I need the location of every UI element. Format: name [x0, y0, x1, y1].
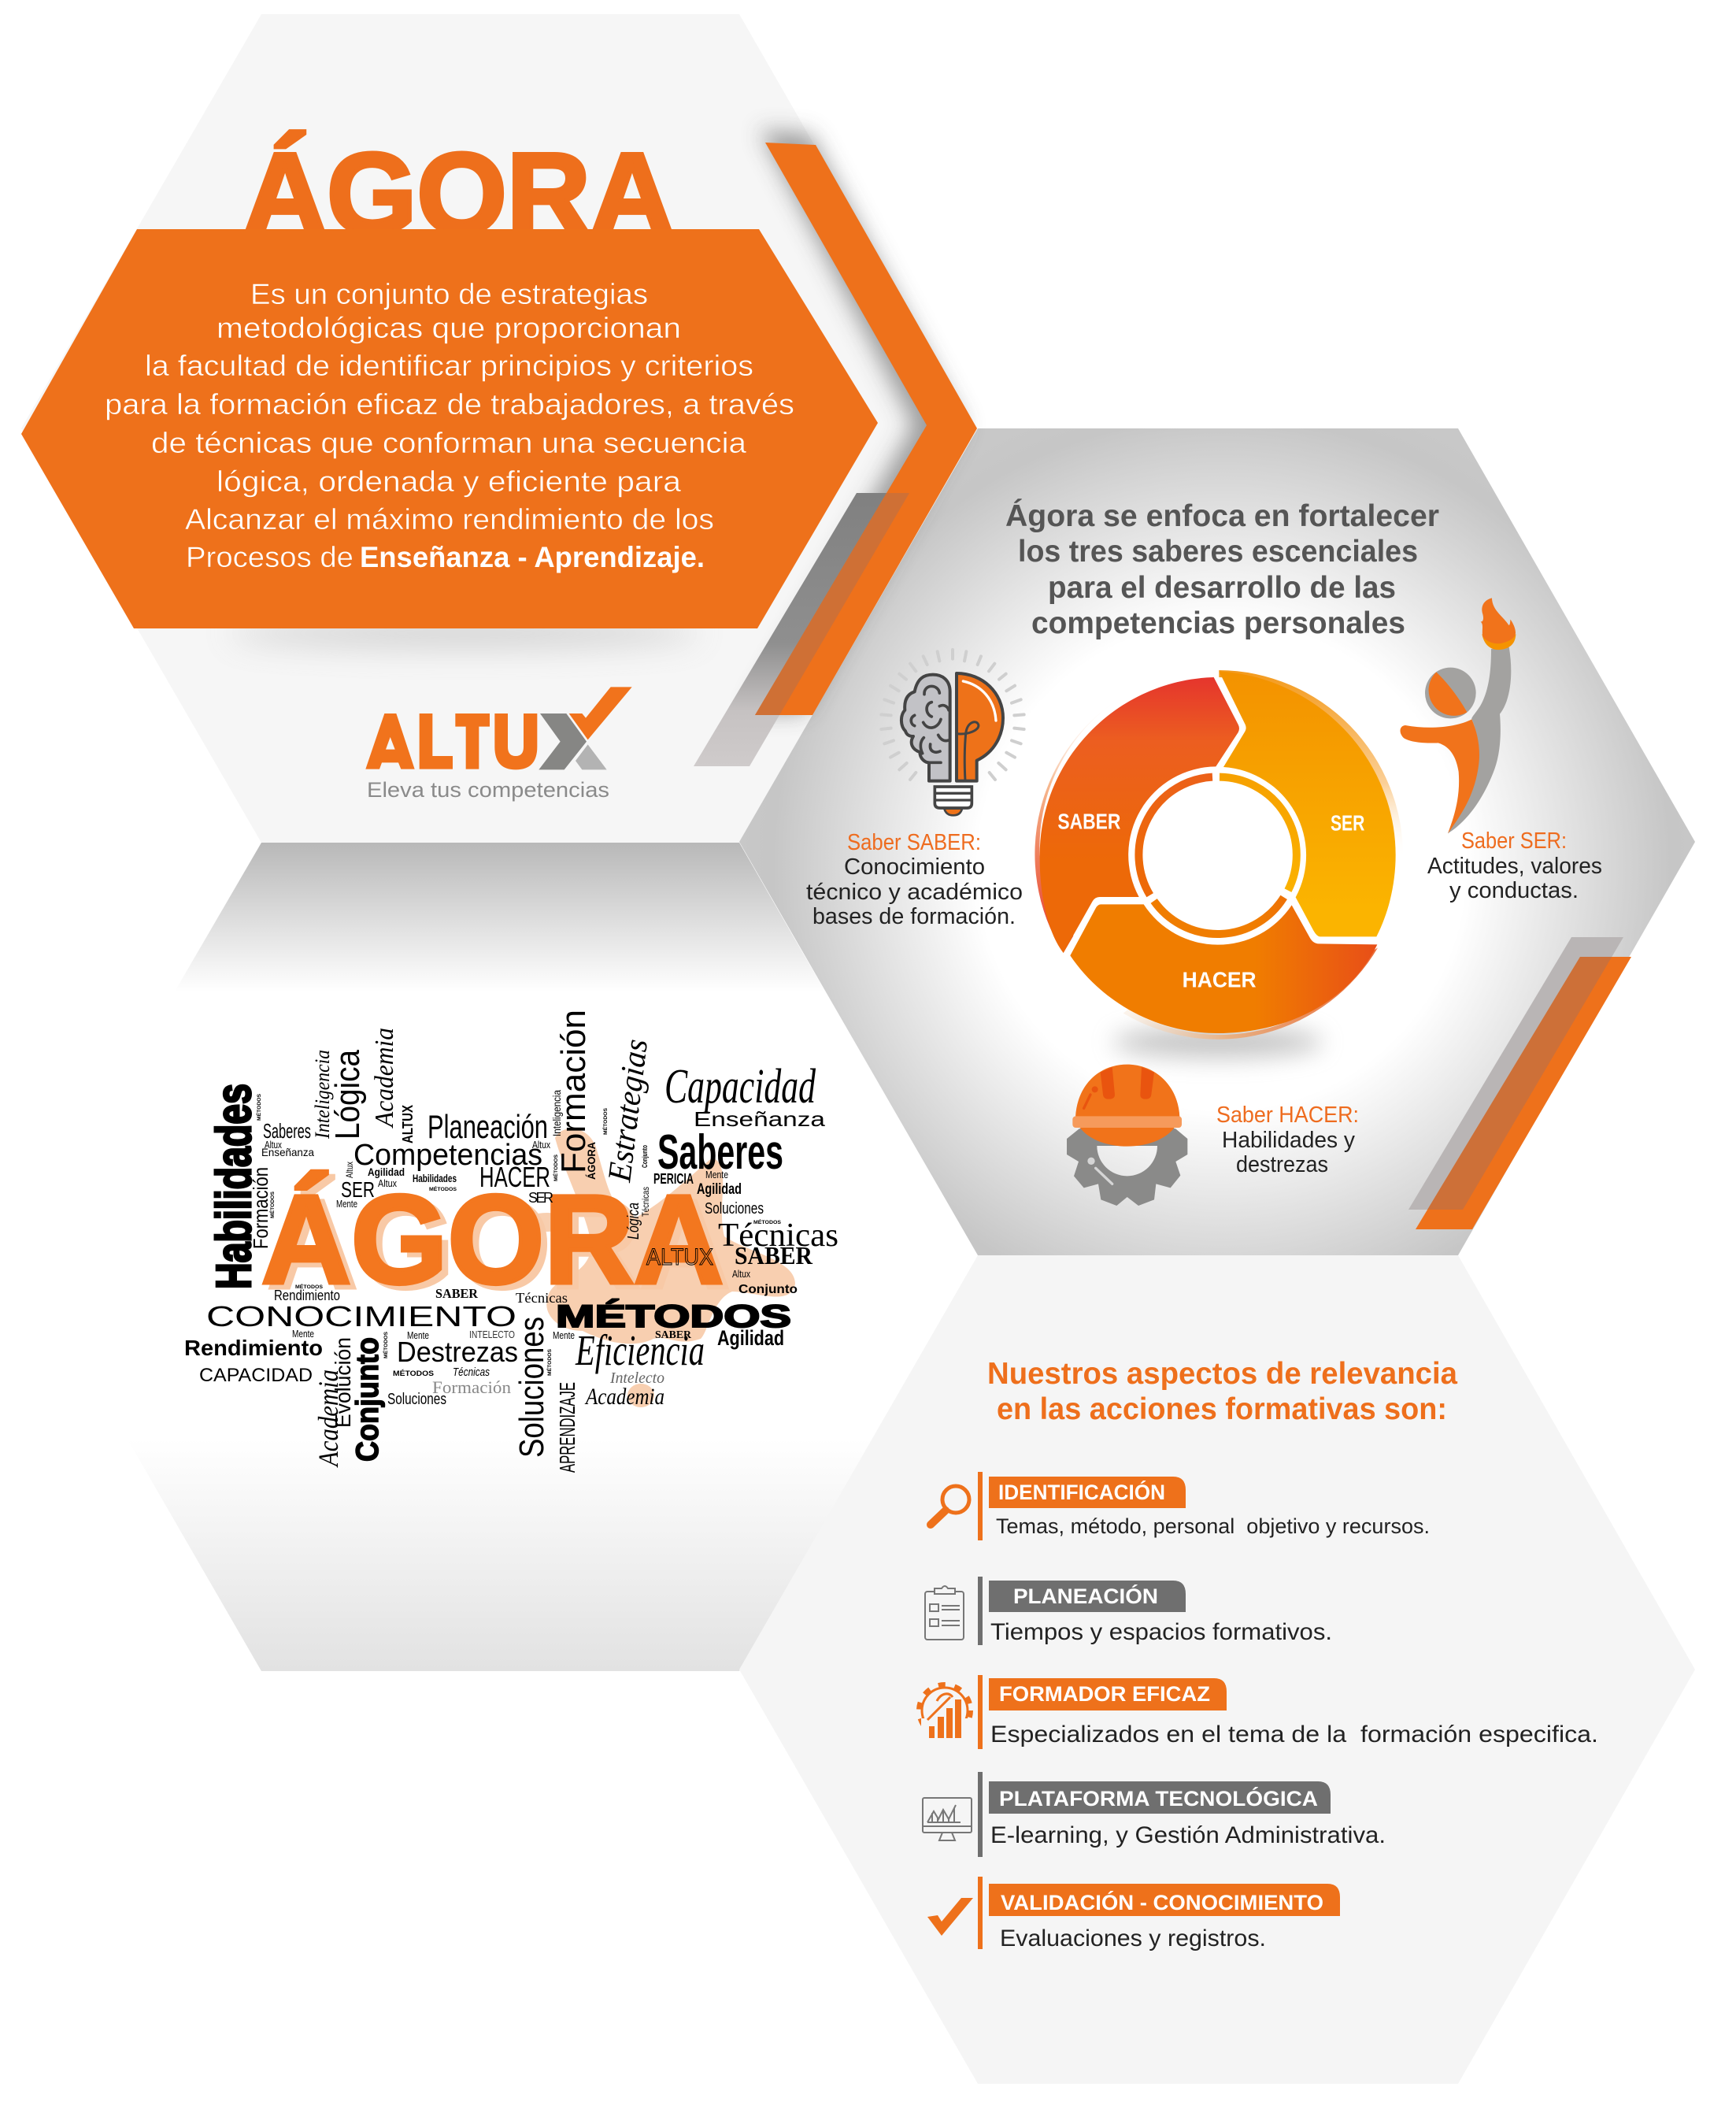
text block: Saber SER: Saber SER:: [1461, 828, 1567, 854]
horizontal words: MÉTODOS: [429, 1186, 457, 1192]
horizontal words: Altux: [532, 1139, 550, 1151]
rotated words: Habilidades: [207, 1084, 261, 1289]
text block: Saber HACER: [1216, 1103, 1359, 1177]
text block: definition: la facultad de identificar principios y criterios: [145, 350, 753, 382]
horizontal words: Técnicas: [516, 1290, 568, 1306]
rotated words: ÁGORA: [585, 1142, 598, 1180]
item: plataforma tecnológica: [923, 1772, 1386, 1857]
text block: Saber SABER: [806, 830, 1023, 929]
heading: three knowledges: [1005, 498, 1439, 640]
chevron shadow: [228, 130, 964, 713]
decorative band: gray left: [694, 493, 909, 766]
horizontal words: Rendimiento: [184, 1336, 323, 1360]
horizontal words: Saberes: [657, 1125, 783, 1180]
item: planeación: PLANEACIÓN: [1013, 1584, 1158, 1608]
rotated words: MÉTODOS: [546, 1349, 553, 1376]
item: validación: [927, 1877, 1340, 1951]
horizontal words: Mente: [553, 1329, 575, 1341]
horizontal words: Competencias: [353, 1139, 542, 1172]
item: plataforma tecnológica: PLATAFORMA TECNOLÓGICA: [999, 1786, 1318, 1811]
text block: Saber SABER: bases de formación.: [812, 904, 1016, 929]
text block: definition: Procesos de: [186, 541, 353, 573]
chart: donut cycle: HACER: [1183, 967, 1257, 991]
horizontal words: Soluciones: [387, 1391, 446, 1408]
horizontal words: Planeación: [428, 1108, 548, 1145]
horizontal words: Agilidad: [717, 1326, 784, 1350]
icon: monitor: [923, 1798, 972, 1840]
decorative band: gray right: [1408, 937, 1623, 1210]
horizontal words: Altux: [732, 1268, 750, 1280]
horizontal words: MÉTODOS: [753, 1219, 781, 1225]
rotated words: APRENDIZAJE: [555, 1382, 579, 1473]
horizontal words: Enseñanza: [261, 1146, 314, 1158]
arrow: orange chevron: [755, 143, 977, 715]
rotated words: Academia: [313, 1369, 344, 1468]
horizontal words: Intelecto: [609, 1369, 664, 1387]
heading: three knowledges: competencias personales: [1031, 606, 1405, 640]
chart: word cloud: ÁGORA: [261, 1169, 724, 1310]
rotated words: Formación: [249, 1167, 272, 1249]
horizontal words: Conjunto: [738, 1283, 798, 1296]
item: planeación: [925, 1577, 1332, 1645]
rotated words: MÉTODOS: [602, 1108, 609, 1135]
heading: relevance aspects: en las acciones formativas son:: [997, 1392, 1447, 1426]
icon: gear chart: [919, 1685, 971, 1739]
horizontal words: Academia: [584, 1384, 664, 1410]
horizontal words: SABER: [735, 1241, 813, 1269]
horizontal words: SABER: [655, 1329, 692, 1341]
rotated words: Lógica: [625, 1203, 642, 1240]
item: identificación: IDENTIFICACIÓN: [998, 1480, 1165, 1504]
rotated words: Técnicas: [640, 1187, 651, 1217]
text block: definition: lógica, ordenada y eficiente para: [217, 465, 681, 498]
splash blob: [524, 1129, 795, 1407]
horizontal words: Técnicas: [453, 1366, 490, 1379]
rotated words: Lógica: [328, 1050, 367, 1140]
rotated words: Estrategias: [601, 1037, 655, 1184]
segment: SABER: [1040, 677, 1239, 953]
rotated words: Formación: [554, 1010, 593, 1173]
text block: Saber HACER: Saber HACER:: [1216, 1103, 1359, 1128]
rotated words: Academia: [370, 1028, 399, 1129]
horizontal words: Enseñanza: [694, 1107, 826, 1131]
segment: SER: [1219, 671, 1396, 936]
horizontal words: Habilidades: [413, 1172, 457, 1184]
text block: definition: de técnicas que conforman una secuencia: [151, 427, 746, 459]
horizontal words: Mente: [407, 1329, 429, 1341]
chart: donut cycle: SER: [1331, 810, 1364, 835]
item: planeación: Tiempos y espacios formativos.: [990, 1619, 1332, 1645]
icon: check mark: [927, 1898, 973, 1936]
rotated words: Inteligencia: [311, 1050, 334, 1140]
panel: top-left hexagon: [21, 14, 977, 843]
horizontal words: MÉTODOS: [556, 1299, 791, 1334]
horizontal words: ALTUX: [646, 1244, 713, 1270]
item: formador eficaz: [919, 1675, 1598, 1749]
horizontal words: Agilidad: [697, 1181, 742, 1198]
chart: donut cycle: SABER: [1057, 809, 1120, 833]
rotated words: Conjunto: [350, 1337, 385, 1462]
item: plataforma tecnológica: E-learning, y Gestión Administrativa.: [990, 1822, 1386, 1848]
icon: torch figure: [1401, 598, 1516, 833]
horizontal words: Técnicas: [718, 1218, 838, 1254]
horizontal words: SER: [528, 1190, 553, 1206]
rotated words: [207, 1010, 655, 1473]
heading: three knowledges: los tres saberes escenciales: [1018, 535, 1418, 569]
horizontal words: CONOCIMIENTO: [206, 1300, 516, 1332]
rotated words: MÉTODOS: [256, 1094, 262, 1121]
big word ÁGORA: ÁGORA: [268, 1173, 730, 1314]
rotated words: MÉTODOS: [383, 1332, 389, 1358]
text block: Saber HACER: Habilidades y: [1222, 1128, 1355, 1153]
text block: Saber SER: [1427, 828, 1602, 903]
heading: relevance aspects: Nuestros aspectos de relevancia: [987, 1357, 1457, 1391]
rotated words: Soluciones: [513, 1317, 551, 1458]
item: identificación: [931, 1472, 1430, 1540]
panel: orange definition hexagon: [21, 229, 878, 628]
item: validación: Evaluaciones y registros.: [1000, 1925, 1266, 1951]
logo tagline: Eleva tus competencias: [367, 778, 609, 802]
horizontal words: Mente: [292, 1328, 314, 1340]
text block: definition: Enseñanza - Aprendizaje.: [360, 541, 705, 573]
horizontal words: SABER: [435, 1286, 479, 1301]
rotated words: Inteligencia: [550, 1090, 563, 1136]
rotated words: MÉTODOS: [553, 1155, 559, 1181]
rotated words: Evolución: [331, 1337, 355, 1428]
inner ring: [1138, 777, 1297, 934]
rotated words: Conjunto: [641, 1145, 649, 1168]
horizontal words: Soluciones: [705, 1200, 764, 1218]
item: formador eficaz: Especializados en el tema de la formación especifica.: [990, 1722, 1598, 1748]
horizontal words: MÉTODOS: [393, 1369, 434, 1377]
text block: Saber HACER: destrezas: [1236, 1152, 1328, 1177]
item: formador eficaz: FORMADOR EFICAZ: [999, 1682, 1210, 1706]
icon: magnifier: [931, 1486, 969, 1525]
horizontal words: MÉTODOS: [295, 1284, 323, 1290]
panel: relevance hexagon: [739, 1255, 1695, 2084]
horizontal words: CAPACIDAD: [199, 1365, 313, 1386]
title: ÁGORA: ÁGORA: [243, 129, 674, 258]
text block: definition: Es un conjunto de estrategias: [250, 278, 648, 310]
arrow: orange right band: [1416, 957, 1631, 1229]
text block: Saber SABER: técnico y académico: [806, 880, 1023, 905]
heading: three knowledges: para el desarrollo de las: [1048, 571, 1396, 605]
text block: Saber SABER: Saber SABER:: [847, 830, 981, 855]
rotated words: ALTUX: [400, 1105, 416, 1143]
text block: definition: [105, 278, 794, 573]
logo: ALTUX: [365, 687, 632, 802]
horizontal words: Formación: [432, 1377, 511, 1397]
horizontal words: PERICIA: [653, 1171, 694, 1187]
chart: word cloud: [184, 1010, 838, 1473]
heading: three knowledges: Ágora se enfoca en fortalecer: [1005, 498, 1439, 533]
panel: three knowledges hexagon: [739, 428, 1695, 1255]
horizontal words: Eficiencia: [575, 1326, 705, 1374]
horizontal words: [184, 1060, 838, 1410]
horizontal words: Saberes: [263, 1119, 311, 1143]
horizontal words: INTELECTO: [469, 1329, 515, 1340]
horizontal words: Altux: [265, 1139, 282, 1151]
horizontal words: Capacidad: [664, 1060, 816, 1114]
heading: relevance aspects: [987, 1357, 1457, 1426]
horizontal words: HACER: [479, 1161, 550, 1193]
text block: Saber SER: Actitudes, valores: [1427, 854, 1602, 879]
text block: definition: Alcanzar el máximo rendimiento de los: [185, 503, 714, 536]
horizontal words: Altux: [378, 1177, 397, 1189]
item: validación: VALIDACIÓN - CONOCIMIENTO: [1001, 1890, 1323, 1914]
horizontal words: Rendimiento: [274, 1288, 340, 1303]
horizontal words: Agilidad: [368, 1166, 405, 1178]
chart: donut cycle: [1035, 670, 1403, 1058]
horizontal words: SER: [341, 1177, 375, 1202]
text block: Saber SER: y conductas.: [1449, 878, 1579, 903]
text block: Saber SABER: Conocimiento: [844, 854, 985, 880]
rotated words: MÉTODOS: [269, 1192, 276, 1218]
text block: definition: para la formación eficaz de trabajadores, a través: [105, 388, 794, 421]
horizontal words: Mente: [336, 1198, 357, 1210]
text block: definition: metodológicas que proporcionan: [217, 312, 681, 344]
icon: brain bulb: [881, 650, 1024, 815]
horizontal words: Destrezas: [397, 1336, 518, 1368]
rotated words: Altux: [344, 1162, 355, 1178]
icon: clipboard: [925, 1586, 964, 1640]
icon: helmet gear: [1067, 1065, 1187, 1206]
segment: HACER: [1070, 904, 1377, 1033]
horizontal words: Mente: [705, 1169, 728, 1180]
item: identificación: Temas, método, personal objetivo y recursos.: [996, 1514, 1430, 1538]
panel: word cloud hexagon: [21, 843, 977, 1671]
